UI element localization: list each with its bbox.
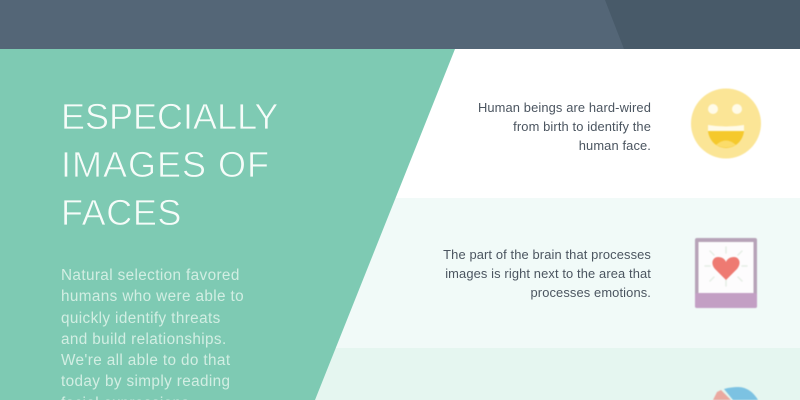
icon: partial circle [712,386,758,400]
text block: brain emotions [443,246,651,300]
text block: brain emotions: The part of the brain that processes [443,246,651,262]
text block: natural selection: and build relationships. [61,331,227,348]
text block: brain emotions: images is right next to the area that [445,266,651,280]
heading [61,96,278,233]
heading: IMAGES OF [61,144,270,185]
icon: photo with heart [694,238,758,308]
icon: smiley face [690,88,762,160]
text block: natural selection: humans who were able to [61,288,244,305]
text block: natural selection: today by simply reading [61,373,230,390]
text block: hard-wired: from birth to identify the [513,118,651,134]
heading: FACES [61,192,182,233]
text block: hard-wired [478,100,651,152]
text block: natural selection: We're all able to do that [61,352,230,369]
text block: natural selection: Natural selection favored [61,267,240,284]
text block: hard-wired: Human beings are hard-wired [478,100,651,114]
heading: ESPECIALLY [61,96,278,137]
panel: header band [0,0,800,49]
panel: green diagonal panel [0,49,455,400]
text block: hard-wired: human face. [579,138,651,152]
text block: brain emotions: processes emotions. [530,284,651,300]
text block: natural selection [61,267,244,400]
text block: natural selection: quickly identify threats [61,310,221,327]
